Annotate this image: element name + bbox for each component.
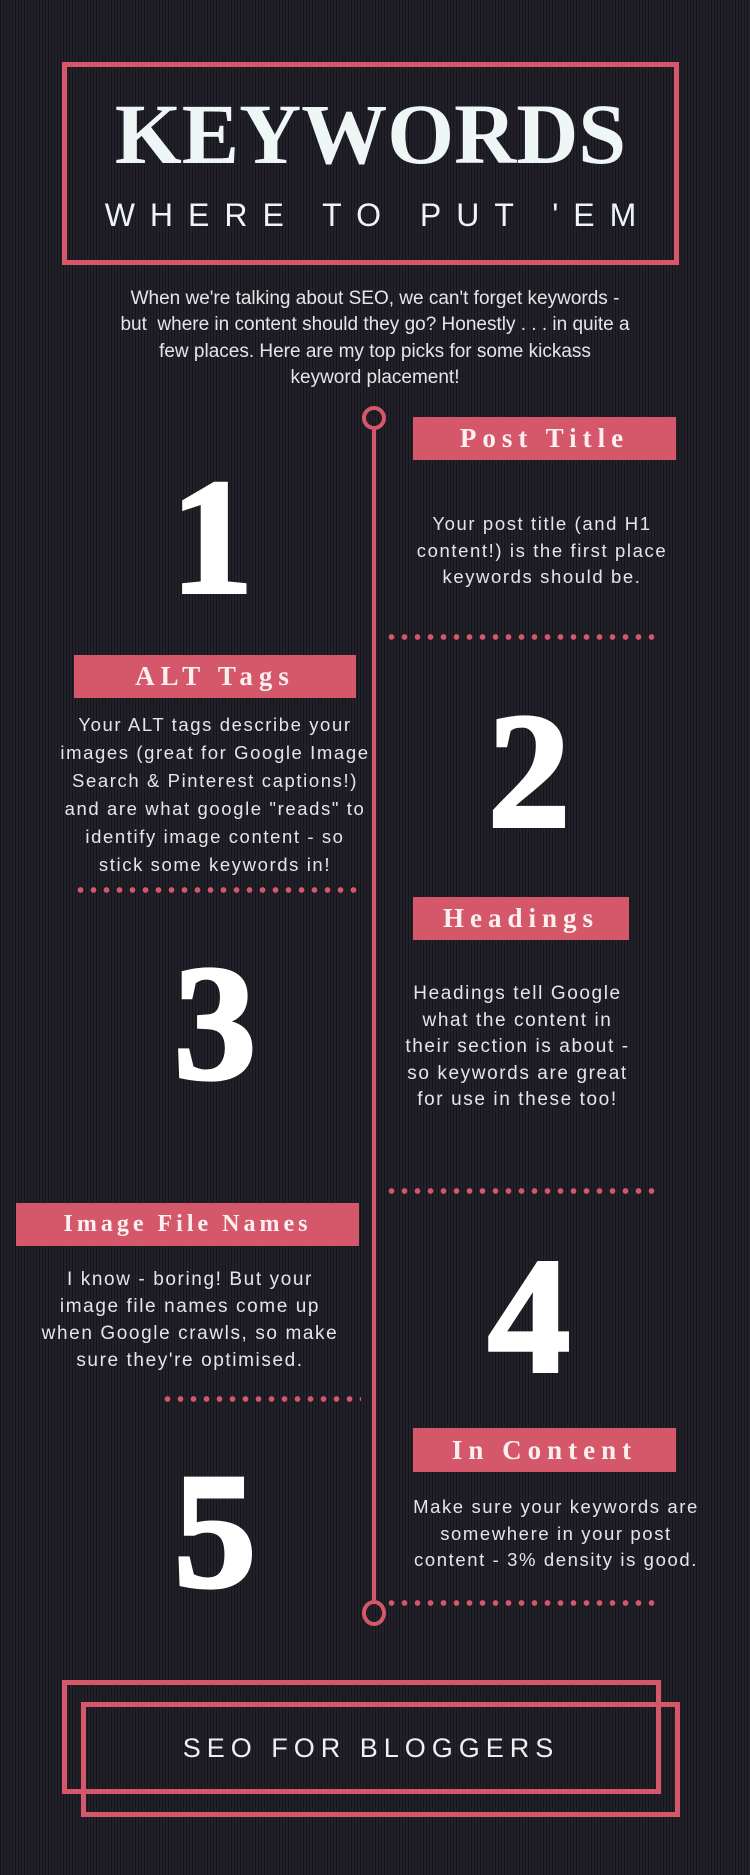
text: keywords should be. xyxy=(442,566,642,587)
title: KEYWORDS: KEYWORDS xyxy=(115,86,626,182)
dotted divider xyxy=(161,1396,361,1402)
label: ALT Tags: ALT Tags xyxy=(135,661,295,691)
intro text: When we're talking about SEO, we can't forget keywords - xyxy=(131,288,619,309)
step 1 xyxy=(171,417,676,640)
front box xyxy=(81,1702,680,1817)
label: Post Title: Post Title xyxy=(460,423,629,453)
text: Your post title (and H1 xyxy=(432,513,652,534)
number 2: 2 xyxy=(488,681,570,862)
text xyxy=(417,513,667,587)
intro text xyxy=(120,288,630,388)
text: images (great for Google Image xyxy=(60,742,370,763)
text: I know - boring! But your xyxy=(67,1269,313,1290)
footer text: SEO FOR BLOGGERS xyxy=(183,1733,559,1763)
text: somewhere in your post xyxy=(440,1522,672,1544)
step 4 xyxy=(16,1203,570,1407)
step 5 xyxy=(174,1428,699,1622)
number 4: 4 xyxy=(488,1226,570,1407)
text: and are what google "reads" to xyxy=(65,798,365,819)
intro text: but where in content should they go? Honestly . . . in quite a xyxy=(120,314,630,335)
text: content!) is the first place xyxy=(417,540,667,560)
step 2 xyxy=(60,655,570,893)
title box xyxy=(62,62,679,265)
text xyxy=(413,1496,699,1570)
back box xyxy=(62,1680,661,1794)
label: In Content xyxy=(413,1428,676,1472)
label: Headings xyxy=(413,897,629,940)
text: Headings tell Google xyxy=(413,983,622,1004)
dotted divider xyxy=(385,634,655,640)
text xyxy=(405,983,630,1110)
number 3: 3 xyxy=(174,933,256,1114)
subtitle: WHERE TO PUT 'EM xyxy=(105,197,651,233)
text: content - 3% density is good. xyxy=(414,1549,698,1570)
dotted divider xyxy=(385,1188,655,1194)
label: Post Title xyxy=(413,417,676,460)
footer boxes xyxy=(62,1680,680,1817)
text: for use in these too! xyxy=(417,1089,618,1110)
label: Image File Names: Image File Names xyxy=(64,1211,311,1237)
label: In Content: In Content xyxy=(452,1434,637,1464)
timeline top circle xyxy=(362,406,386,430)
text xyxy=(60,714,370,875)
text: Search & Pinterest captions!) xyxy=(72,770,358,791)
text: Your ALT tags describe your xyxy=(78,714,352,735)
intro text: keyword placement! xyxy=(291,367,459,388)
number 5: 5 xyxy=(174,1441,256,1622)
text: Make sure your keywords are xyxy=(413,1496,699,1517)
text: what the content in xyxy=(423,1010,612,1030)
timeline bottom circle xyxy=(362,1600,386,1626)
label: Headings: Headings xyxy=(443,903,599,933)
step 3 xyxy=(174,897,654,1194)
text: their section is about - xyxy=(405,1036,630,1057)
timeline line xyxy=(372,430,376,1600)
label: ALT Tags xyxy=(74,655,356,698)
intro text: few places. Here are my top picks for some kickass xyxy=(159,341,591,362)
dotted divider xyxy=(74,887,362,893)
dotted divider xyxy=(385,1600,660,1606)
text: so keywords are great xyxy=(407,1062,628,1084)
text: stick some keywords in! xyxy=(99,854,331,875)
label: Image File Names xyxy=(16,1203,359,1246)
text: image file names come up xyxy=(60,1296,320,1317)
text xyxy=(42,1269,338,1371)
number 1: 1 xyxy=(171,447,253,628)
text: identify image content - so xyxy=(85,826,345,847)
text: when Google crawls, so make xyxy=(42,1323,338,1344)
text: sure they're optimised. xyxy=(76,1350,304,1371)
